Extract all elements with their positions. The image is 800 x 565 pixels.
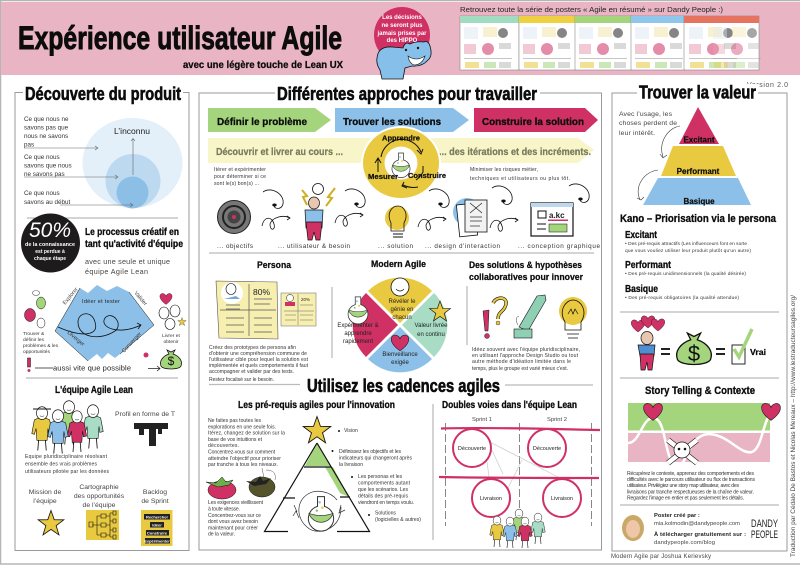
dual track diagram: Livraison [480,496,502,502]
known unknown circles: savons au début [24,199,70,206]
sprint backlog: de Sprint [141,498,169,505]
persona text: implémentée et quels comportements il faut [209,363,309,369]
sprint backlog [141,489,172,546]
discover and deliver band: ... des itérations et des incréments. [439,147,591,158]
icon: solution bulb: ... solution [378,243,413,250]
team description: Equipe pluridisciplinaire résolvant [25,454,108,460]
heading: Trouver la valeur [639,82,756,102]
known unknown circles: nous ne savons [24,133,68,140]
pyramid bullets: (logicielles & autres) [375,517,421,523]
value pyramid: Basique [683,197,715,206]
author credits: Poster créé par : [654,513,700,519]
poster thumbnails [460,16,761,70]
creative process heading: équipe Agile Lean [85,267,148,276]
subtitle: avec une légère touche de Lean UX [183,59,343,71]
sprint backlog: Construire [147,530,168,536]
50% badge: de la connaissance [25,242,75,248]
prerequisites text: atteindre l'objectif pour prioriser [208,456,281,462]
icon: graphic design: ... conception graphique [518,243,600,250]
icon: target: ... objectifs [217,243,253,250]
version: Version 2.0 [747,82,788,89]
section: modern agile [337,259,450,372]
kano section: • Des pré-requis attractifs (Les influenceurs font en sorte [625,241,747,247]
as fast as possible: aussi vite que possible [53,364,131,372]
dual track diagram: Sprint 1 [472,417,492,423]
prerequisites text: base de vos intuitions et [208,437,263,443]
icon: interaction design: ... design d'interaction [425,243,500,250]
story text: Regardez l'image en entier et pas seulement les détails. [627,496,744,502]
prerequisites text: dont vous avez besoin [208,519,258,525]
usage note [619,111,677,137]
section: collaborative solutions: collaboratives pour innover [469,272,583,283]
collaborative text [472,347,580,372]
persona text [209,345,309,383]
prerequisites text: découvertes. [208,443,239,449]
usage note: Avec l’usage, les [619,111,673,118]
title: Expérience utilisateur Agile [18,20,342,56]
prerequisites text: par tranche à tous les niveaux. [208,462,278,468]
prerequisites text: Concentrez-vous sur ce [208,513,261,519]
value equation: $ [688,341,700,366]
section: prerequisites: Les pré-requis agiles pour l'innovation [238,400,395,411]
header banner [1,2,800,79]
diverge converge diagram: Idéer et tester [82,299,120,305]
persona cards: 80% [253,287,270,297]
team illustration [32,401,103,454]
collaborative text: Idéez souvent avec l'équipe pluridisciplinaire, [472,347,580,353]
icon: problem faces [23,290,59,355]
modern agile wheel: rapidement [343,339,373,345]
usage note: choses perdent de [619,120,677,127]
modern agile wheel: en continu [417,332,445,338]
pyramid bullets: viendront en temps voulu. [358,500,414,506]
sprint backlog: Idéer [152,522,162,528]
creative process heading: tant qu'activité d'équipe [85,239,183,250]
icon: tomatoes [206,468,275,499]
icon: pencil [514,295,546,338]
flow squiggles [262,184,589,231]
cadences heading: Utilisez les cadences agiles [307,376,500,396]
pyramid bullets: comportements autant [358,480,411,486]
icon: graphic design: a.kc [549,211,565,220]
persona cards [216,281,316,339]
hippo badge: ne seront plus [381,23,423,29]
section: persona: Persona [257,260,292,271]
modern agile wheel: Expérimenter & [337,323,379,329]
heading: Découverte du produit [25,84,181,104]
team description: utilisateurs pilotée par les données [25,469,109,475]
icon: exclamation and question [483,298,506,338]
dual track diagram: Sprint 2 [547,417,567,423]
icon: problem faces: Trouver & [23,331,45,337]
team heading: L'équipe Agile Lean [55,384,133,396]
kano section: Basique [625,284,658,295]
dual track diagram: Découverte [458,446,486,452]
team illustration small [490,509,545,548]
sprint backlog: Rechercher [146,514,168,520]
creative process heading [85,227,183,276]
opportunity map: de l’équipe [83,502,116,509]
known unknown circles: Ce que nous [24,154,60,161]
50% badge: est perdue à [35,249,65,255]
T-shaped profile: Profil en forme de T [115,411,175,418]
chevrons: Définir le problème [217,116,307,128]
discover and deliver band [208,138,594,163]
agile pyramid [264,416,370,532]
prerequisites text: Concentrez-vous sur comment [208,450,276,456]
section: collaborative solutions [469,260,587,372]
50% badge: chaque étape [34,256,66,262]
50% badge [21,214,80,272]
modern agile wheel: chacun [392,315,412,321]
known unknown circles: Ce que nous ne [24,116,69,123]
heading: Différentes approches pour travailler [277,84,537,104]
story text [627,471,755,502]
modern agile wheel: Révéler le [388,299,416,305]
icon: stressed user [278,184,350,250]
diverge converge diagram: Explorer [62,287,80,306]
chevrons [208,108,598,132]
pyramid bullets: Vision [344,428,358,434]
discover and deliver band: Découvrir et livrer au cours ... [216,147,343,158]
known unknown circles: savons pas que [24,124,69,132]
value equation: Vrai [750,347,766,357]
prerequisites text: maintenant pour créer [208,526,258,532]
pyramid bullets: la livraison [339,462,363,468]
icon: delivered value [144,294,186,369]
panel: différentes approches [199,84,602,550]
icon: delivered value: Livrer et [162,333,180,339]
minimise note: techniques et utilisateurs ou plus tôt. [470,176,570,182]
value pyramid: Performant [677,167,720,176]
creative process heading: Le processus créatif en [85,227,179,238]
modern agile credit: Modern Agile par Joshua Kerievsky [611,554,711,560]
author credits: dandypeople.com/blog [654,540,715,546]
prerequisites text: de la valeur. [208,532,235,538]
author photo [622,515,644,541]
panel: trouver la valeur [612,82,787,551]
chevrons: Trouver les solutions [343,116,441,128]
hippo badge: jamais prises par [376,31,427,37]
hippo badge: des HIPPO [387,38,418,44]
icon: interaction design [425,198,500,250]
team mission: Mission de [29,489,61,496]
section: collaborative solutions: Des solutions & hypothèses [469,260,582,271]
author credits [654,513,746,546]
dual track diagram: Découverte [533,446,561,452]
author credits: À télécharger gratuitement sur : [654,531,746,538]
section: modern agile: Modern Agile [371,259,426,270]
prerequisites text: à toute vitesse. [208,506,240,512]
iterate note: pour déterminer si ce [214,174,266,180]
pyramid bullets: Définissez les objectifs et les [339,449,401,455]
collaborative text: autre méthode d'idéation limitée dans le [472,359,571,365]
known unknown circles: savons que nous [24,162,72,170]
kano section: Performant [625,260,672,271]
build measure learn cycle: Apprendre [382,134,420,142]
modern agile wheel: exigée [391,360,410,366]
icon: problem faces: définir les [23,337,44,343]
section: prerequisites [206,400,421,538]
sprint backlog: Expérimenter [144,538,170,544]
opportunity map: des opportunités [74,493,125,500]
icon: delivered value: obtenir [164,339,179,345]
build measure learn cycle: Construire [408,171,446,180]
story telling heading: Story Telling & Contexte [645,385,755,397]
panel: découverte du produit [15,84,189,550]
collaborative text: en utilisant l'approche Design Studio ou tout [472,353,579,359]
story text: utilisateur. Privilégiez une story map utilisateur, avec des [627,483,739,489]
sprint backlog: Backlog [143,489,167,496]
kano section [620,213,777,301]
icon: delivered value: $ [168,354,175,368]
pyramid bullets: que les scénarios. Les [358,487,408,493]
dandy people logo [751,518,778,541]
prerequisites text [208,418,285,538]
chevrons: Construire la solution [482,116,584,128]
modern agile wheel: génie en [390,307,414,313]
usage note: leur intérêt. [619,130,655,137]
minimise note [470,167,570,182]
as fast as possible [28,358,160,372]
persona text: Restez focalisé sur le besoin. [209,377,274,383]
persona cards: 20% [301,297,310,302]
prerequisites text: Les exigences vieillissent [208,500,264,506]
story text: difficultés avec le parcours utilisateur ou flux de transactions [627,477,755,483]
opportunity map: Cartographie [79,484,119,491]
icon: problem faces: opportunités [23,349,50,355]
kano section: • Des pré-requis unidimensionnels (la qualité désirée) [625,271,746,277]
section: persona [209,260,316,383]
icon: graphic design [518,203,600,250]
persona text: d'obtenir une compréhension commune de [209,351,307,357]
hippo badge: Les décisions [382,15,423,21]
known unknown circles: pas [24,142,34,148]
pyramid bullets: indicateurs qui changeront après [339,456,412,462]
prerequisites text: Ne faites pas toutes les [208,418,261,424]
persona text: Créez des prototypes de persona afin [209,345,296,351]
value pyramid: Excitant [683,136,715,144]
icon: stressed user: ... utilisateur & besoin [278,243,350,250]
known unknown circles: L’inconnu [114,126,150,136]
kano section: • Des pré-requis obligatoires (la qualité attendue) [625,295,739,301]
diverge converge diagram: Diverger [66,330,86,348]
icon: target [217,200,253,250]
team mission [29,489,64,535]
pyramid bullets: détails des pré-requis [358,494,408,500]
build measure learn cycle: Mesurer [368,172,398,181]
emotion chart [628,403,780,465]
iterate note: Itérer et expérimenter [214,167,266,173]
50% badge: 50% [29,219,71,242]
icon: lightbulb [559,297,587,338]
value equation [631,316,766,370]
kano section: Excitant [625,230,658,241]
modern agile wheel: Bienveillance [382,352,418,358]
prerequisites text: Itérez, changez de solution sur la [208,430,285,436]
team description [25,454,109,475]
section: dual track: Doubles voies dans l'équipe Lean [442,400,577,411]
prerequisites text: explorations en une seule fois. [208,424,276,430]
icon: problem faces: problèmes & les [23,343,59,349]
opportunity map [74,484,125,540]
dual track diagram: Livraison [551,496,573,502]
known unknown circles [24,116,182,208]
hippo badge [374,7,431,79]
iterate note: sont le(s) bon(s) ... [214,181,259,187]
diverge converge diagram: Valider [132,290,148,307]
iterate note [214,167,266,187]
T-shaped profile [115,411,175,446]
persona text: l'utilisateur cible pour lequel la solution est [209,357,309,363]
pyramid bullets: Les personas et les [358,474,403,480]
modern agile wheel: Valeur livrée [415,323,448,329]
modern agile wheel [337,278,450,372]
minimise note: Minimiser les risques métier, [470,167,538,173]
author credits: mia.kolmodin@dandypeople.com [654,521,740,527]
modern agile wheel: apprendre [344,331,372,337]
collaborative text: temps, plus le groupe est varié mieux c'est. [472,366,568,372]
known unknown circles: ne savons pas [24,171,65,178]
kano section: Kano – Priorisation via le persona [620,213,777,225]
story text: Récupérez le contexte, apprenez des comportements et des [627,471,754,477]
persona text: accompagner et valider par des tests. [209,369,294,375]
section: dual track [439,400,600,548]
creative process heading: avec une seule et unique [85,257,170,266]
diverge converge diagram [55,285,154,361]
dandy people logo: PEOPLE [751,529,778,541]
story text: livraisons par tranche respectueuses de la chaîne de valeur. [627,490,754,496]
translation credit: Traduction par Cédalo De Bastos et Nicolas Mereaux – http://www.lestraducteursagiles.org/ [791,295,797,557]
team description: ensemble des vrais problèmes [25,462,97,468]
known unknown circles: Ce que nous [24,190,60,197]
pyramid bullets [332,428,421,523]
series caption: Retrouvez toute la série de posters « Agile en résumé » sur Dandy People :) [460,5,723,14]
dual track diagram [439,417,600,526]
build measure learn cycle [361,126,446,200]
icon: solution bulb [378,206,413,250]
dandy people logo: DANDY [751,518,778,530]
diverge converge diagram: Converger [121,331,143,354]
value pyramid [637,107,751,206]
pyramid bullets: Solutions [375,510,396,516]
kano section: que vous vouliez utiliser leur produit plutôt qu'un autre) [625,248,751,254]
team mission: l’équipe [33,498,57,505]
